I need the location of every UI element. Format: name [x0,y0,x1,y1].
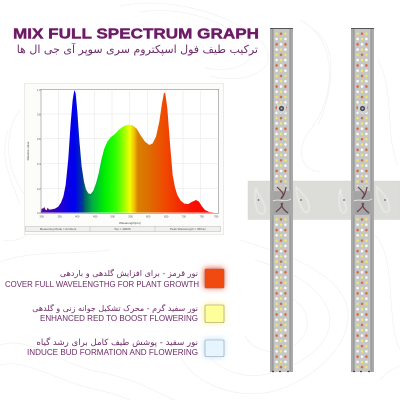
LED rows: upper half [351,31,374,186]
axis tick labels: 550 [128,214,133,218]
axis tick labels: 780 [214,214,219,218]
legend item: warm white light [32,303,224,323]
legend item: white light: INDUCE BUD FORMATION AND FLOWERING [27,347,198,357]
LED rows: upper half [270,31,293,186]
plot area [41,89,219,213]
axis tick labels: 450 [93,214,98,218]
light fixture: right [351,28,374,372]
legend item: white light: نور سفید - پوشش طیف کامل برای رشد گیاه [36,337,198,348]
wire junction [351,187,374,215]
axis tick labels [37,88,219,218]
axis tick labels: 650 [164,214,169,218]
light fixture: left [270,28,293,372]
legend item: warm white light: ENHANCED RED TO BOOST FLOWERING [40,313,198,323]
spectrum curve [41,90,219,213]
spectrum chart panel: Wavelength[nm] [119,221,141,225]
mounting bracket [248,181,400,220]
bracket clips [255,187,389,214]
axis tick labels: 500 [110,214,115,218]
legend item: warm white light: نور سفید گرم - محرک تشکیل جوانه زنی و گلدهی [32,303,198,313]
spectrum chart panel [24,84,224,234]
wire junction [270,187,293,215]
chart status bar: Tcp = 4000K [114,227,131,231]
title: MIX FULL SPECTRUM GRAPH [13,26,259,42]
axis tick labels: 350 [58,214,62,218]
legend item: red light: COVER FULL WAVELENGTHG FOR PLANT GROWTH [5,279,199,289]
icon: light blue swatch [204,339,224,357]
axis tick labels: 0.0 [37,211,41,215]
axis tick labels: 400 [75,214,80,218]
chart status bar [26,226,220,232]
LED rows: lower half [351,217,374,369]
sensor [277,104,286,113]
chart status bar: Peak Wavelength = 450nm [170,227,206,231]
axis tick labels: 1.0 [37,88,41,92]
LED rows: lower half [270,217,293,369]
subtitle in Persian: ترکیب طیف فول اسپکتروم سری سوپر آی جی ال ها [17,42,258,56]
chart status bar: Measuring Mode = Ambient [40,227,76,231]
legend item: red light: نور قرمز - برای افزایش گلدهی و باردهی [60,268,198,278]
axis tick labels: 300 [40,214,44,218]
axis tick labels: 0.6 [37,137,41,141]
axis tick labels: 0.8 [37,112,41,116]
axis tick labels: 600 [146,214,151,218]
spectrum chart panel: Relative value [26,141,30,160]
axis tick labels: 700 [182,214,186,218]
axis tick labels: 0.4 [37,162,41,166]
axis tick labels: 0.2 [37,187,41,191]
legend item: red light [5,268,224,289]
icon: red swatch [204,268,224,288]
sensor [358,104,367,113]
legend item: white light [27,337,224,357]
icon: yellow swatch [204,304,224,323]
axis tick labels: 750 [200,214,204,218]
